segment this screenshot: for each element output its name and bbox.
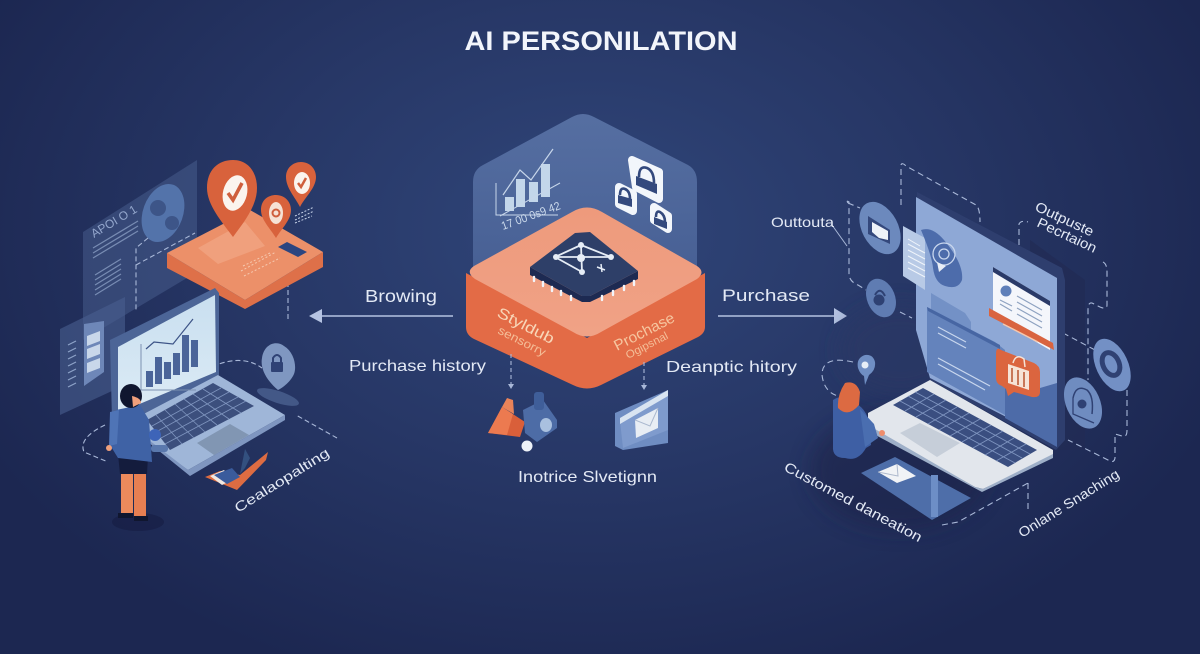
- icon: circle padlock: [1056, 371, 1110, 435]
- dashed connectors: [83, 233, 337, 462]
- person right: [833, 382, 885, 459]
- icon: map pin large: [207, 160, 257, 237]
- label: Online Snaching: Onlane Snaching: [1016, 466, 1122, 541]
- chat bubble panel: [903, 226, 925, 290]
- icon: open folder: [205, 449, 268, 490]
- text label: Purchase history: Purchase history: [349, 358, 486, 375]
- text label: Inotrice Slvetignn: Inotrice Slvetignn: [518, 469, 657, 486]
- person left: [106, 384, 168, 531]
- hexagon glass panel: [473, 114, 697, 290]
- icon: AI chip: [530, 232, 638, 302]
- chart on left laptop: [141, 319, 198, 390]
- text label: Browing: Browing: [365, 286, 437, 306]
- dashed outlines: [822, 164, 1127, 525]
- icon: notification bubble: [858, 355, 875, 385]
- translucent list panel: [60, 297, 125, 415]
- dashed connectors centre: [511, 354, 644, 387]
- text label: Deanptic hitory: Deanptic hitory: [666, 359, 797, 376]
- label: Outpuste Pecrtaion: [1033, 198, 1099, 256]
- icon: desk envelope tablet: [861, 457, 971, 520]
- icon: map pin medium: [261, 195, 291, 238]
- panel: right output cluster: [771, 164, 1138, 545]
- label: Outpuste Pecrtaion: Pecrtaion: [1035, 214, 1099, 256]
- document panels: [931, 293, 971, 345]
- isometric block: Ogipsnal: [624, 330, 670, 362]
- icon: ring circle: [1086, 333, 1138, 397]
- icon: orange and blue parcels: [488, 392, 557, 452]
- hexagon glass panel: 17 00 0s9 42: [500, 200, 562, 233]
- label: Outpuste Pecrtaion: Outpuste: [1033, 198, 1097, 239]
- label: Outtouta: Outtouta: [771, 214, 834, 230]
- soft shadow: [810, 410, 990, 530]
- arrow: left: [309, 309, 453, 323]
- laptop left: [110, 288, 285, 476]
- isometric block: [466, 208, 705, 388]
- panel: central AI processor: [466, 114, 705, 388]
- icon: map pin small: [286, 162, 316, 207]
- screen large: [903, 192, 1065, 450]
- isometric block: Prochase: [611, 309, 678, 355]
- icon: lock pin: [255, 343, 301, 410]
- icon: circle chat: [851, 195, 909, 261]
- icon: security locks: [618, 160, 668, 229]
- arrow: right: [718, 308, 847, 324]
- product card: [993, 267, 1050, 350]
- translucent report panel: APOI O 1: [88, 202, 140, 241]
- orange shopping bubble: [996, 349, 1040, 397]
- icon: envelope folder: [615, 390, 668, 450]
- panel: left data input cluster: [60, 160, 337, 531]
- translucent report panel: [83, 160, 197, 340]
- icon: circle lock: [861, 274, 901, 322]
- label: Cealaopalting: Cealaopalting: [232, 445, 332, 516]
- orange platform: [167, 210, 323, 309]
- isometric block: Styldub: [494, 304, 557, 348]
- laptop right base: [868, 380, 1053, 492]
- label: Customed daneation: Customed daneation: [782, 459, 925, 545]
- text label: Purchase: Purchase: [722, 287, 810, 305]
- isometric block: sensorry: [496, 323, 548, 359]
- title: AI PERSONILATION: [464, 26, 738, 56]
